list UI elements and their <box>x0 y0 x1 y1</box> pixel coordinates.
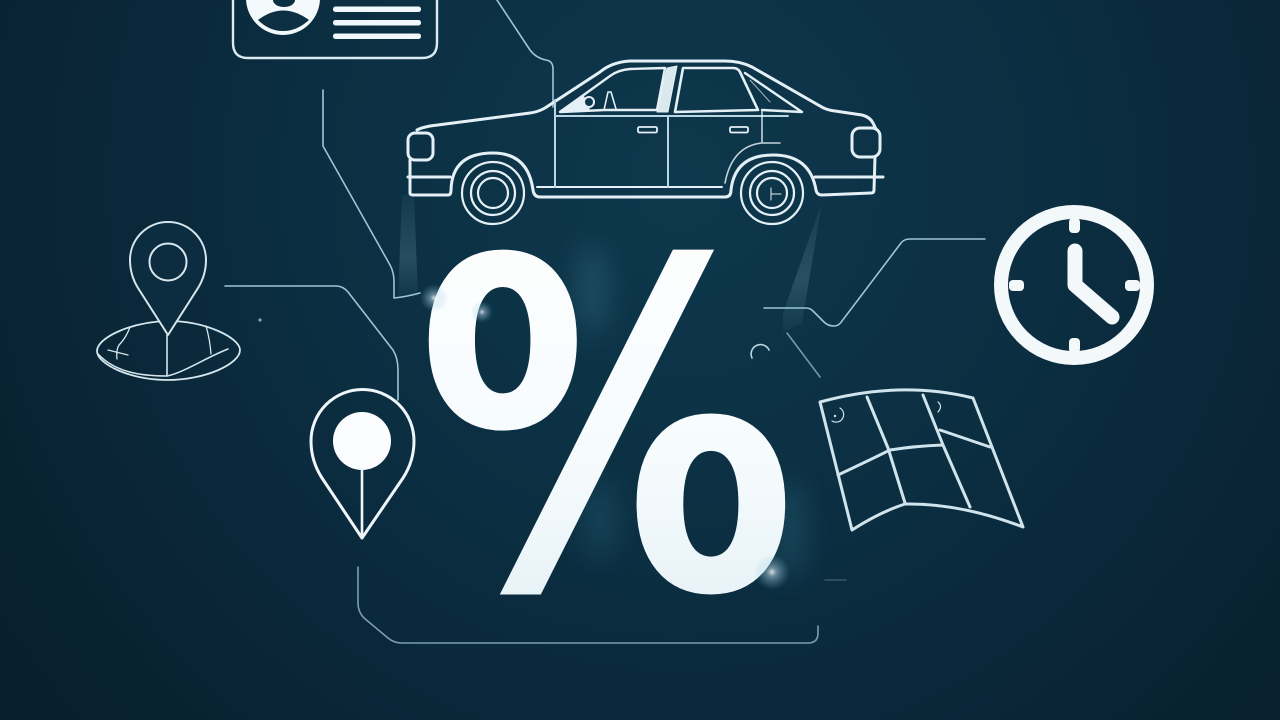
icon: id card <box>233 0 437 58</box>
icon: large location pin <box>311 390 414 538</box>
light beams <box>398 195 822 332</box>
icon: map pin on disc <box>97 222 240 380</box>
icon: folded map <box>820 390 1023 530</box>
connector lines <box>225 0 985 643</box>
icon: car <box>408 61 883 224</box>
icon: clock <box>1001 212 1147 358</box>
glints on percent <box>420 284 790 590</box>
percent glow <box>578 245 804 580</box>
icon: rear wheel <box>741 162 803 224</box>
id text lines <box>333 6 421 39</box>
avatar <box>246 0 320 35</box>
percent symbol: % <box>416 164 797 696</box>
icon: front wheel <box>462 162 524 224</box>
